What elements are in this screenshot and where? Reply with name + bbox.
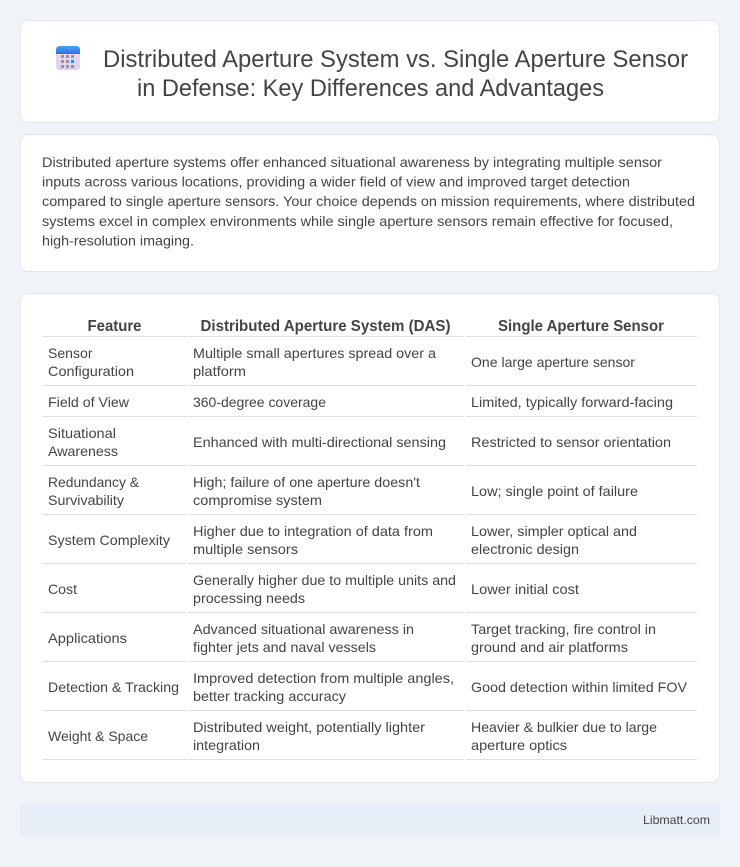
table row: system complexity: System Complexity — [48, 532, 170, 548]
table row: system complexity — [43, 523, 697, 564]
table row: situational awareness: Enhanced with multi-directional sensing — [193, 434, 446, 450]
table row: weight and space: Distributed weight, potentially lighter — [193, 719, 425, 735]
table row: detection and tracking: Improved detection from multiple angles, — [193, 670, 454, 686]
table row: sensor configuration: Multiple small apertures spread over a — [193, 345, 436, 361]
table row: applications: Applications — [48, 630, 127, 646]
table row: sensor configuration: Configuration — [48, 363, 134, 379]
text block: summary paragraph: Distributed aperture systems offer enhanced situational awareness by integrating multiple sensor — [42, 154, 662, 170]
table row: weight and space: aperture optics — [471, 737, 567, 753]
table row: detection and tracking: Good detection within limited FOV — [471, 679, 688, 695]
panel: header — [20, 20, 720, 122]
table row: system complexity: multiple sensors — [193, 541, 298, 557]
table row: applications: Advanced situational awareness in — [193, 621, 414, 637]
icon: calendar grid — [56, 46, 80, 70]
table row: redundancy and survivability: Survivability — [48, 492, 124, 508]
table row: situational awareness: Restricted to sensor orientation — [471, 434, 671, 450]
title: Distributed Aperture System vs. Single Aperture Sensor — [103, 46, 688, 73]
table row: detection and tracking — [43, 670, 697, 711]
table row: system complexity: Higher due to integration of data from — [193, 523, 433, 539]
table row: applications: ground and air platforms — [471, 639, 628, 655]
table row: redundancy and survivability: Low; single point of failure — [471, 483, 638, 499]
table row: system complexity: electronic design — [471, 541, 579, 557]
text block: summary paragraph: inputs across various locations, providing a wider field of view and improved target detection — [42, 174, 630, 190]
table row: weight and space — [43, 719, 697, 760]
table row: cost: processing needs — [193, 590, 305, 606]
panel: comparison table — [20, 294, 720, 782]
table row: redundancy and survivability: Redundancy & — [48, 474, 140, 490]
table row: situational awareness — [43, 425, 697, 466]
table row: redundancy and survivability: compromise system — [193, 492, 322, 508]
footer band — [20, 803, 720, 837]
table row: sensor configuration: Sensor — [48, 345, 93, 361]
table row: redundancy and survivability: High; failure of one aperture doesn't — [193, 474, 420, 490]
table row: field of view: Field of View — [48, 394, 130, 410]
table row: weight and space: Heavier & bulkier due to large — [471, 719, 657, 735]
table row: field of view — [43, 394, 697, 417]
table row: detection and tracking: Detection & Tracking — [48, 679, 179, 695]
table row: applications — [43, 621, 697, 662]
table row: situational awareness: Awareness — [48, 443, 118, 459]
table row: weight and space: integration — [193, 737, 260, 753]
table header row: Distributed Aperture System (DAS) — [200, 318, 450, 335]
table row: field of view: Limited, typically forward-facing — [471, 394, 673, 410]
panel: introduction — [20, 134, 720, 272]
table row: weight and space: Weight & Space — [48, 728, 148, 744]
table row: field of view: 360-degree coverage — [193, 394, 326, 410]
table row: cost — [43, 572, 697, 613]
table header row: Feature — [88, 318, 142, 335]
table row: sensor configuration — [43, 345, 697, 386]
table row: applications: fighter jets and naval vessels — [193, 639, 376, 655]
text block: summary paragraph: compared to single aperture sensors. Your choice depends on mission requirements, where distributed — [42, 193, 695, 209]
table row: system complexity: Lower, simpler optical and — [471, 523, 637, 539]
text block: summary paragraph — [42, 154, 695, 248]
table row: cost: Lower initial cost — [471, 581, 579, 597]
table row: situational awareness: Situational — [48, 425, 116, 441]
table header row — [43, 318, 697, 337]
table row: redundancy and survivability — [43, 474, 697, 515]
title: in Defense: Key Differences and Advantages — [137, 75, 604, 102]
text block: summary paragraph: systems excel in complex environments while single aperture sensors remain effective for focused, — [42, 213, 673, 229]
table row: applications: Target tracking, fire control in — [471, 621, 656, 637]
title — [103, 46, 688, 102]
table row: cost: Cost — [48, 581, 77, 597]
footer credit: Libmatt.com — [643, 813, 710, 827]
table row: sensor configuration: platform — [193, 363, 246, 379]
text block: summary paragraph: high-resolution imaging. — [42, 232, 194, 248]
table row: sensor configuration: One large aperture sensor — [471, 354, 635, 370]
table row: detection and tracking: better tracking accuracy — [193, 688, 346, 704]
table header row: Single Aperture Sensor — [498, 318, 664, 335]
table row: cost: Generally higher due to multiple units and — [193, 572, 456, 588]
